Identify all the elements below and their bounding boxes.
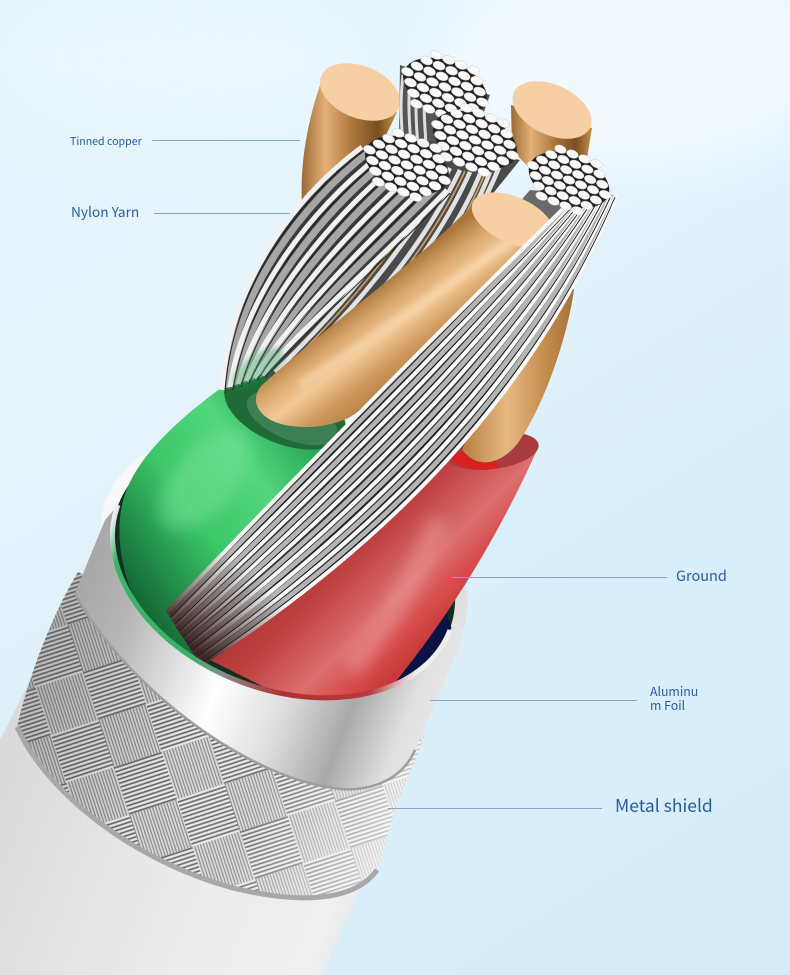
label: Metal shield: Metal shield (615, 793, 713, 818)
back silver strand bundle (390, 41, 500, 150)
label: Aluminum Foil (430, 682, 698, 714)
label: Aluminum Foil: m Foil (650, 696, 685, 714)
right silver strand bundle back (500, 190, 590, 250)
cable outer jacket (0, 640, 425, 975)
metal ring back rim and interior (61, 380, 507, 754)
metal ring front (75, 505, 462, 789)
label: Nylon Yarn: Nylon Yarn (71, 201, 139, 221)
green insulated wire (119, 355, 357, 665)
label: Ground: Ground (676, 565, 727, 586)
back right tinned copper wire (503, 70, 601, 200)
center silver strand bundle (262, 140, 520, 378)
main silver strand bundle (167, 195, 616, 665)
back left tinned copper wire (302, 52, 409, 205)
right silver strand end face (516, 136, 622, 224)
red insulated wire (190, 427, 541, 705)
metal braided shield (17, 572, 425, 898)
left silver strand bundle (222, 147, 450, 396)
front tinned copper wire (256, 181, 563, 427)
label: Aluminum Foil: Aluminu (650, 682, 698, 700)
silver strand end faces (352, 94, 530, 211)
label: Tinned copper: Tinned copper (70, 134, 143, 149)
lower right copper wire (462, 220, 574, 462)
